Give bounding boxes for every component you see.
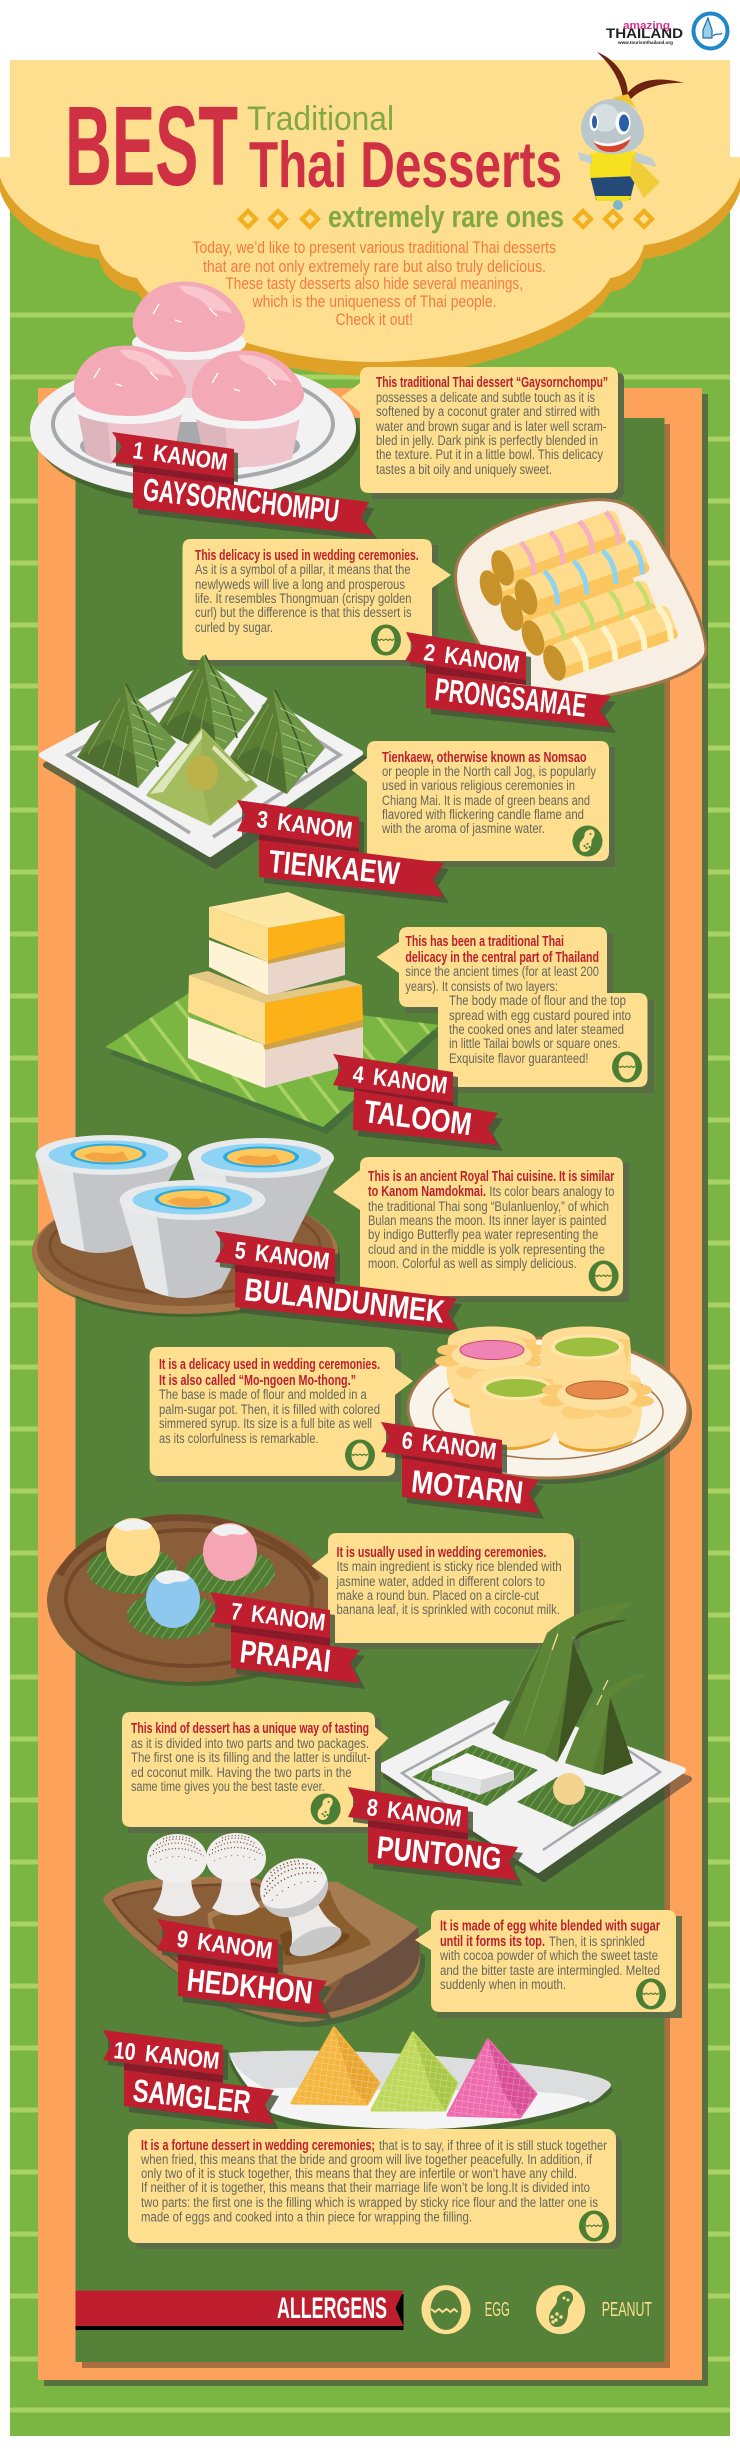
icon: egg allergen [371, 624, 401, 656]
icon: egg allergen [612, 1052, 642, 1082]
icon: egg allergen [589, 1260, 619, 1292]
text box 4: since the ancient times (for at least 200 [405, 964, 599, 979]
text box 1: possesses a delicate and subtle touch as it is [376, 390, 595, 405]
text box 2: curl) but the difference is that this dessert is [195, 605, 412, 620]
text box 10 [128, 2129, 622, 2249]
text box 3: Tienkaew, otherwise known as Nomsao [382, 750, 587, 766]
ribbon 6: MOTARN [410, 1463, 525, 1511]
text box 9: with cocoa powder of which the sweet taste [439, 1948, 658, 1963]
text box 6: simmered syrup. Its size is a full bite as well [159, 1416, 372, 1431]
icon: peanut allergen [572, 826, 602, 856]
text box 7: banana leaf, it is sprinkled with coconut milk. [336, 1602, 560, 1617]
text box 5: the traditional Thai song “Bulanluenloy,” of which [368, 1199, 609, 1214]
text box 7: Its main ingredient is sticky rice blended with [336, 1559, 562, 1574]
header banner [0, 60, 740, 376]
icon: peanut allergen [311, 1794, 341, 1824]
text box 3: flavored with flickering candle flame and [382, 807, 584, 822]
text box 1: the texture. Put it in a little bowl. This delicacy [376, 447, 603, 462]
text box 8: as it is divided into two parts and two packages. [131, 1736, 369, 1751]
logo: Amazing Thailand [606, 20, 683, 45]
text box 4: years). It consists of two layers: [405, 979, 558, 994]
text box 3: or people in the North call Jog, is popularly [382, 764, 596, 779]
text box 3: used in various religious ceremonies in [382, 778, 575, 793]
panel: orange frame [38, 388, 708, 2386]
dessert illustration 4: Taloom stacked on banana leaf [105, 892, 443, 1134]
text box 7: make a round bun. Placed on a circle-cut [336, 1588, 539, 1603]
text box 6: palm-sugar pot. Then, it is filled with colored [159, 1402, 380, 1417]
legend: peanut [536, 2285, 652, 2334]
ribbon 7: 7 KANOM [229, 1598, 327, 1637]
ribbon 2: 2 KANOM [422, 639, 521, 678]
ribbon 2: PRONGSAMAE [433, 671, 588, 724]
ribbon 9: HEDKHON [185, 1962, 314, 2011]
text box 3 [352, 741, 615, 867]
text box 9: until it forms its top. [440, 1934, 545, 1950]
intro text: Today, we’d like to present various traditional Thai desserts [192, 238, 556, 257]
legend: peanut: PEANUT [602, 2299, 652, 2321]
ribbon 5: BULANDUNMEK [243, 1271, 446, 1330]
text box 2: As it is a symbol of a pillar, it means that the [195, 562, 410, 577]
logo: Amazing Thailand: www.tourismthailand.org [617, 40, 673, 45]
dessert illustration 6: Motarn on plate [408, 1326, 692, 1484]
ornaments: gold diamonds [237, 208, 655, 230]
icon: egg allergen [579, 2210, 609, 2242]
text box 5: Bulan means the moon. Its inner layer is painted [368, 1213, 606, 1228]
ribbon 9 [157, 1919, 332, 2020]
ribbon 1 [112, 432, 379, 541]
text box 5: Its color bears analogy to [489, 1184, 614, 1199]
dessert illustration 10: Samgler on plate [229, 2028, 613, 2135]
ribbon 5 [215, 1231, 462, 1336]
legend: egg [422, 2285, 510, 2334]
text box 2: curled by sugar. [195, 620, 273, 635]
text box 10: two parts: the first one is the filling which is wrapped by sticky rice flour and the latter one is [141, 2195, 598, 2210]
ribbon 4: 4 KANOM [351, 1061, 449, 1100]
dessert illustration 7: Prapai on tray [47, 1518, 334, 1686]
dessert illustration 5: Bulandunmek cups on tray [32, 1135, 340, 1317]
text box 7: It is usually used in wedding ceremonies. [336, 1545, 546, 1561]
text box 5: by indigo Butterfly pea water representing the [368, 1227, 598, 1242]
allergens banner: ALLERGENS [277, 2292, 387, 2325]
text box 1 [341, 367, 624, 499]
logo: TAT emblem [694, 14, 728, 48]
ribbon 3 [237, 800, 449, 903]
dessert illustration 9: Hedkhon on wooden tray [103, 1833, 425, 2027]
dessert illustration 8: Puntong on plate [380, 1602, 689, 1879]
intro text: These tasty desserts also hide several meanings, [226, 274, 523, 293]
intro text: that are not only extremely rare but also truly delicious. [203, 257, 546, 276]
ribbon 8 [348, 1787, 523, 1886]
text box 4: spread with egg custard poured into [449, 1008, 631, 1023]
text box 6: It is also called “Mo-ngoen Mo-thong.” [159, 1373, 356, 1389]
ribbon 3: TIENKAEW [267, 843, 402, 892]
ribbon 1: GAYSORNCHOMPU [141, 471, 341, 529]
ribbon 7 [210, 1592, 365, 1689]
ribbon 8: PUNTONG [375, 1829, 503, 1877]
text box 4: The body made of flour and the top [449, 993, 626, 1008]
intro text [192, 238, 556, 329]
logo: Amazing Thailand: THAILAND [606, 25, 683, 41]
title: Thai Desserts: Thai Desserts [249, 128, 562, 201]
text box 8: same time gives you the best taste ever. [131, 1779, 325, 1794]
text box 9 [415, 1910, 682, 2018]
text box 6: It is a delicacy used in wedding ceremonies. [159, 1357, 380, 1373]
ribbon 5: 5 KANOM [233, 1237, 331, 1276]
text box 9: Then, it is sprinkled [549, 1934, 645, 1949]
ribbon 10: SAMGLER [131, 2072, 252, 2120]
ribbon 10: 10 KANOM [112, 2037, 221, 2075]
text box 7 [312, 1533, 580, 1649]
text box 10: made of eggs and cooked into a thin piece for wrapping the filling. [141, 2210, 472, 2224]
text box 6: as its colorfulness is remarkable. [159, 1431, 318, 1446]
ribbon 2 [405, 632, 616, 733]
text box 10: only two of it is stuck together, this means that they are infertile or won’t have any child. [141, 2166, 577, 2181]
legend: egg: EGG [485, 2299, 510, 2321]
ribbon 7: PRAPAI [238, 1633, 333, 1679]
text box 9: It is made of egg white blended with sugar [440, 1918, 660, 1934]
text box 10: when fried, this means that the bride and groom will live together peacefully. In addition, if [140, 2152, 592, 2167]
text box 6: The base is made of flour and molded in a [159, 1387, 367, 1402]
title: Traditional: Traditional [247, 100, 394, 138]
text box 4: This has been a traditional Thai [405, 934, 564, 950]
text box 8: This kind of dessert has a unique way of tasting [131, 1721, 369, 1737]
mascot [578, 52, 684, 210]
text box 3: Chiang Mai. It is made of green beans and [382, 793, 590, 808]
text box 8 [122, 1712, 388, 1833]
icon: egg allergen [345, 1440, 375, 1470]
text box 7: jasmine water, added in different colors to [336, 1574, 545, 1589]
text box 4: Exquisite flavor guaranteed! [449, 1051, 588, 1066]
text box 9: and the bitter taste are intermingled. Melted [440, 1963, 660, 1978]
text box 2: newlyweds will live a long and prosperous [195, 577, 405, 592]
dessert illustration 1: Gaysornchompu on plate [30, 281, 360, 505]
text box 1: softened by a coconut grater and stirred with [376, 404, 600, 419]
text box 2: This delicacy is used in wedding ceremonies. [195, 548, 419, 564]
text box 10: If neither of it is together, this means that their marriage life won’t be long.It is divided into [141, 2180, 590, 2195]
logo: Amazing Thailand: amazing [623, 20, 670, 32]
ribbon 6: 6 KANOM [400, 1427, 498, 1466]
text box 8: ed coconut milk. Having the two parts in the [131, 1765, 352, 1780]
dessert illustration 3: Tienkaew on square plate [42, 655, 368, 866]
panel: dark green content area [76, 418, 670, 2368]
text box 10: that is to say, if three of it is still stuck together [379, 2138, 607, 2153]
text box 4: the cooked ones and later steamed [449, 1022, 624, 1037]
intro text: Check it out! [336, 310, 413, 329]
text box 8: The first one is its filling and the latter is undilut- [131, 1750, 370, 1765]
text box 5: to Kanom Namdokmai. [368, 1184, 486, 1200]
text box 1: bled in jelly. Dark pink is perfectly blended in [376, 433, 598, 448]
text box 5: This is an ancient Royal Thai cuisine. It is similar [368, 1169, 615, 1185]
text box 4: delicacy in the central part of Thailand [405, 950, 599, 966]
icon: egg allergen [636, 1978, 666, 2010]
text box 2: life. It resembles Thongmuan (crispy golden [195, 591, 412, 606]
text box 10: It is a fortune dessert in wedding ceremonies; [141, 2138, 375, 2154]
title: BEST: BEST [65, 83, 238, 209]
text box 5: moon. Colorful as well as simply delicious. [368, 1256, 577, 1271]
allergens banner [76, 2290, 404, 2330]
ribbon 8: 8 KANOM [365, 1794, 463, 1833]
text box 4: in little Tailai bowls or square ones. [449, 1036, 621, 1051]
text box 2 [182, 539, 451, 666]
text box 4 [377, 927, 654, 1093]
ribbon 4: TALOOM [362, 1093, 474, 1142]
text box 1: water and brown sugar and is later well scram- [375, 419, 606, 434]
dessert illustration 2: Prongsamae on plate [456, 500, 706, 707]
text box 5: cloud and in the middle is yolk representing the [368, 1242, 605, 1257]
text box 9: suddenly when in mouth. [440, 1977, 566, 1992]
ribbon 3: 3 KANOM [255, 806, 354, 845]
text box 6 [150, 1347, 413, 1482]
intro text: which is the uniqueness of Thai people. [252, 292, 496, 311]
text box 1: tastes a bit oily and uniquely sweet. [376, 462, 552, 477]
ribbon 10 [103, 2030, 279, 2130]
text box 3: with the aroma of jasmine water. [381, 821, 545, 836]
ribbon 9: 9 KANOM [175, 1926, 274, 1965]
subtitle: extremely rare ones: extremely rare ones [328, 199, 564, 234]
ribbon 4 [333, 1054, 503, 1151]
ribbon 6 [381, 1422, 544, 1519]
text box 1: This traditional Thai dessert “Gaysornchompu” [376, 375, 608, 391]
ribbon 1: 1 KANOM [131, 437, 229, 476]
text box 5 [333, 1157, 629, 1302]
